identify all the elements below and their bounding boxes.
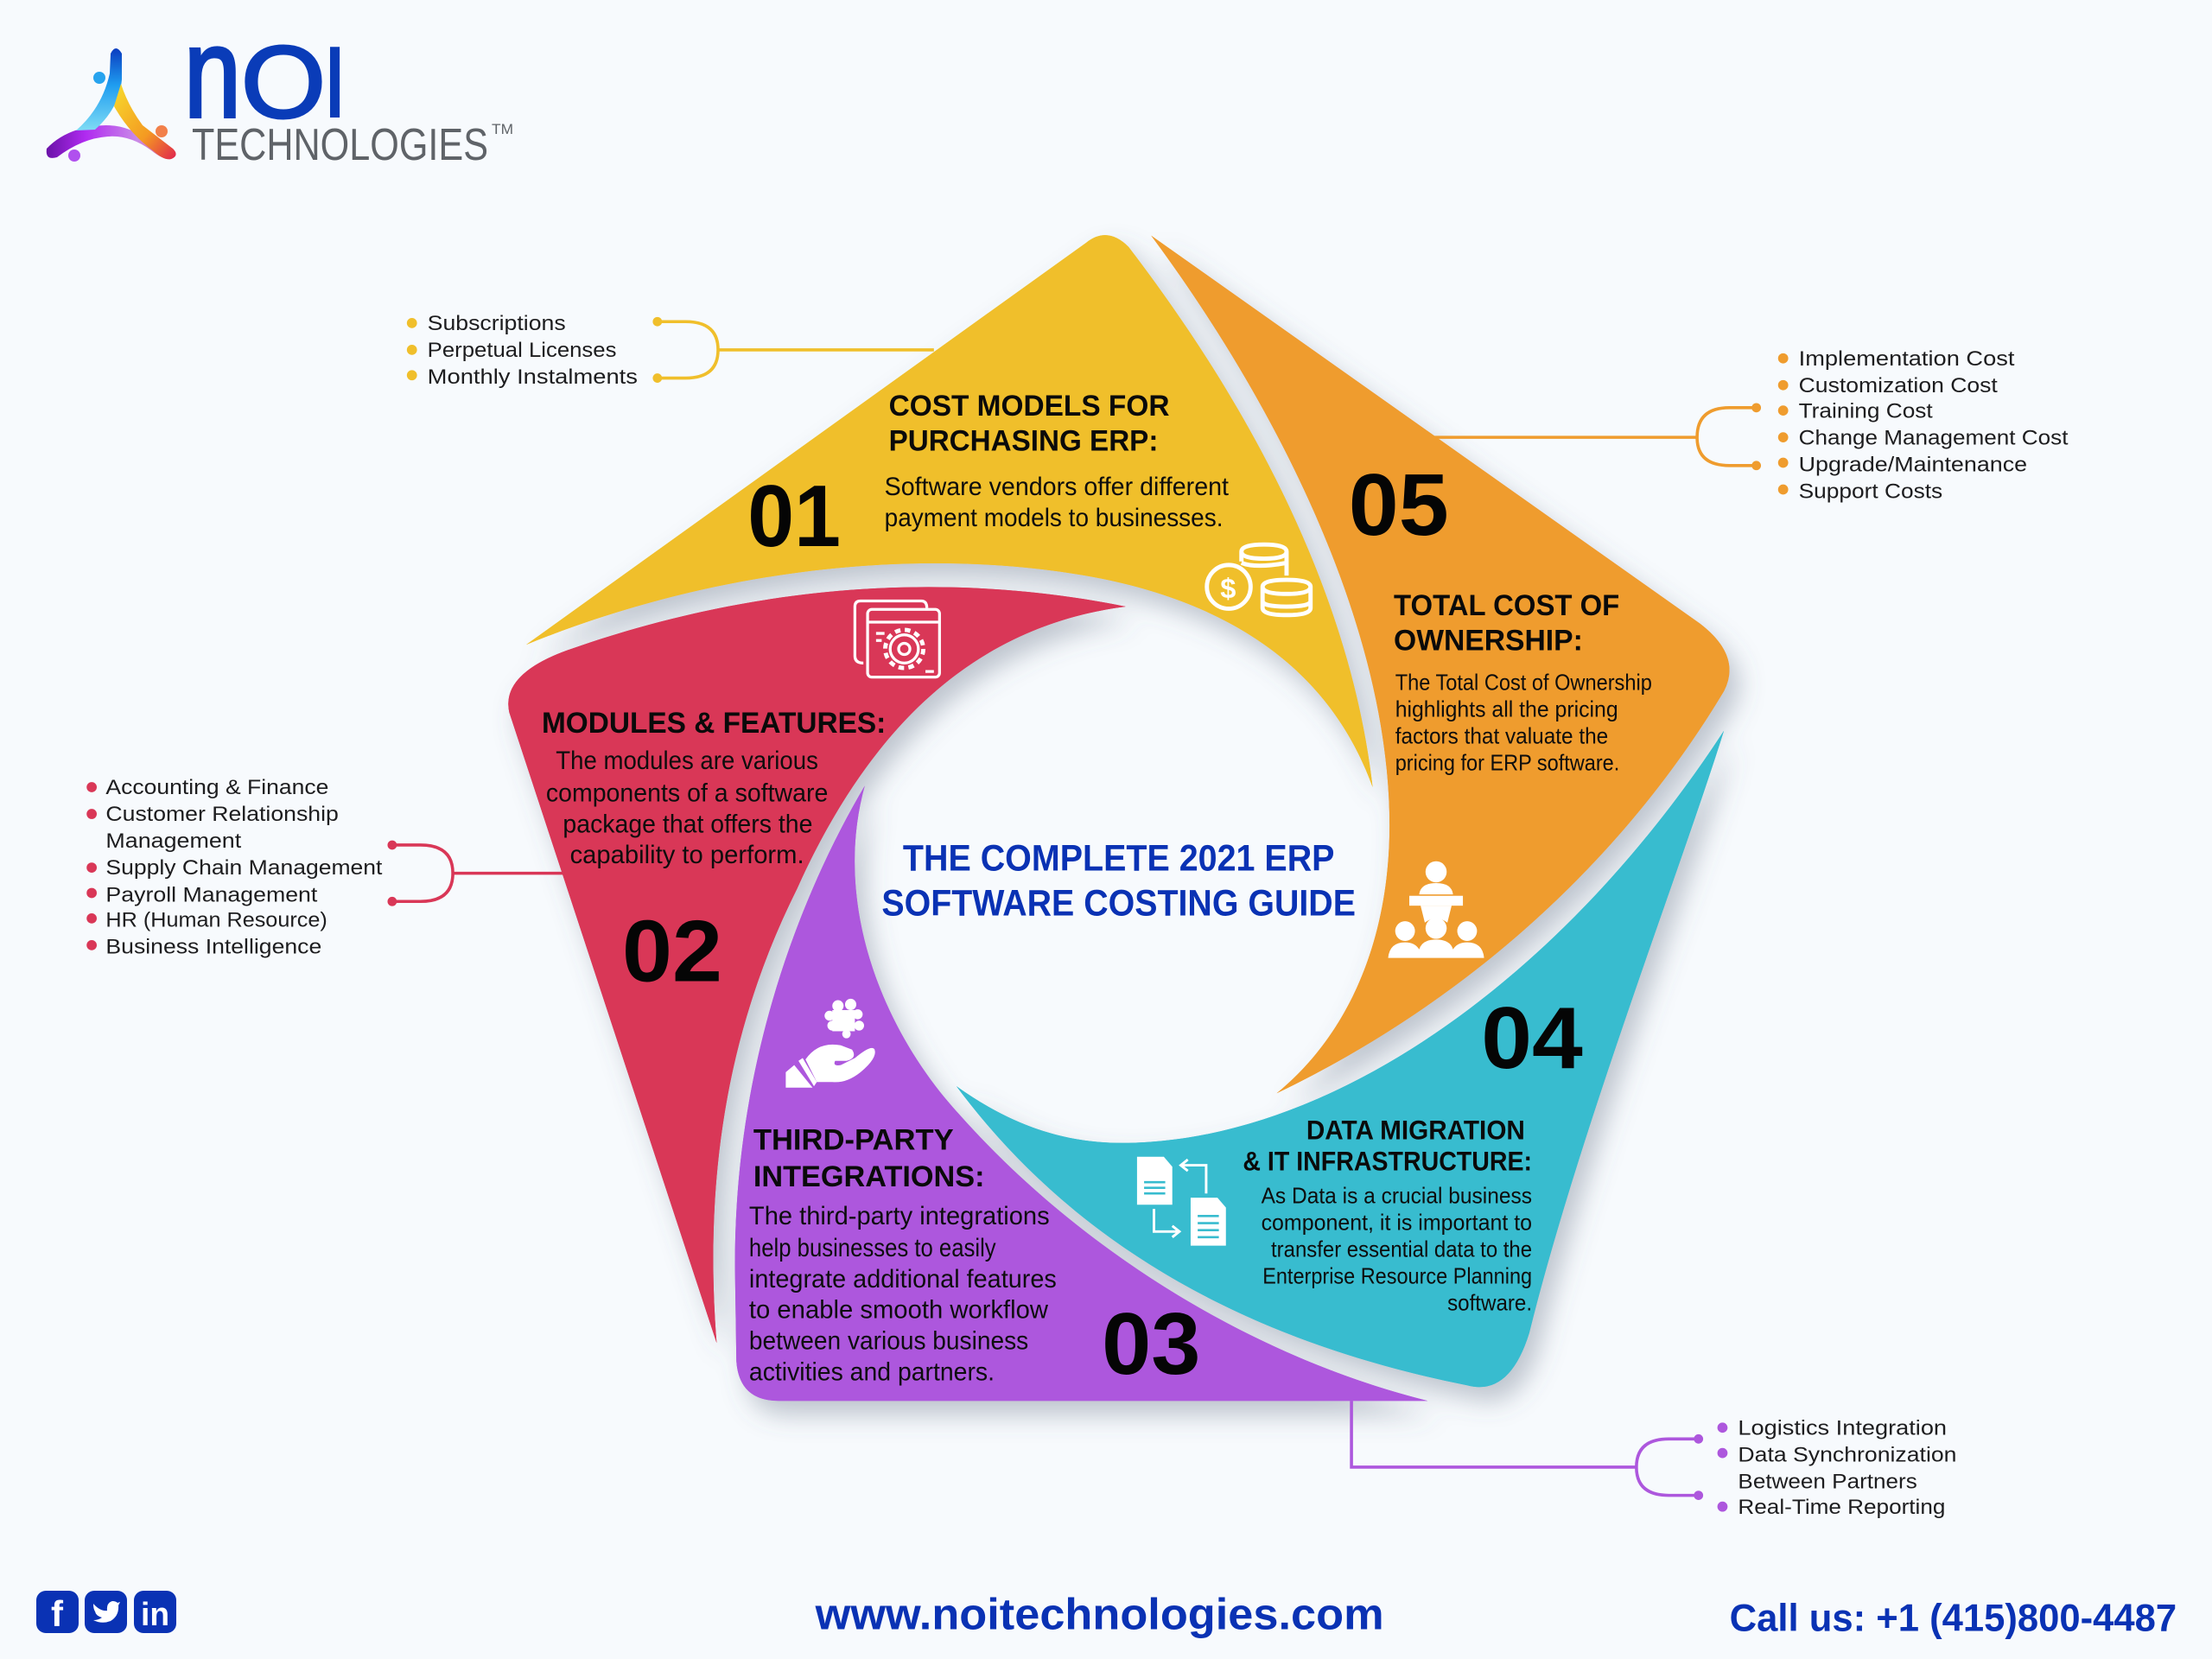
description: third-party [749,1202,1057,1387]
description: data migration: component, it is important to [1262,1210,1532,1236]
list: total cost [1778,347,2069,503]
heading: data migration: & IT INFRASTRUCTURE: [1243,1146,1532,1176]
social icons [36,1591,176,1634]
panel 04: data migration [957,731,1724,1387]
description: third-party: help businesses to easily [749,1234,996,1262]
logo subtitle: TECHNOLOGIES [192,120,488,170]
number 02: 02 [622,903,722,1001]
description: data migration: software. [1447,1290,1532,1316]
description: modules: package that offers the [563,810,812,838]
description: third-party: activities and partners. [749,1358,995,1387]
description: modules: capability to perform. [570,841,804,869]
icon: linkedin [134,1591,176,1633]
list: cost models [407,312,638,389]
description: third-party: The third-party integrations [749,1202,1050,1230]
list: total cost: Upgrade/Maintenance [1799,453,2027,476]
icon: hand with puzzle piece [785,999,875,1088]
list: total cost: Change Management Cost [1799,426,2069,449]
icon: speaker at podium [1389,861,1484,958]
icon: coins [1207,544,1311,615]
description: total cost: factors that valuate the [1395,722,1608,748]
heading: cost models [889,390,1170,458]
connector: cost models [654,319,934,381]
list: third-party: Between Partners [1738,1470,1917,1493]
icon: twitter [85,1591,127,1633]
heading: cost models: COST MODELS FOR [889,390,1170,423]
description: data migration: Enterprise Resource Planning [1262,1263,1532,1289]
logo wordmark: O [241,25,326,140]
description: cost models [885,473,1229,532]
phone: Call us: +1 (415)800-4487 [1730,1597,2177,1639]
logo wordmark: I [321,25,349,140]
heading: data migration: DATA MIGRATION [1306,1115,1525,1145]
description: total cost: pricing for ERP software. [1395,749,1619,775]
list: total cost: Customization Cost [1799,374,1998,397]
description: cost models: Software vendors offer different [885,473,1229,501]
list: modules: Accounting & Finance [105,776,328,799]
heading: third-party integrations: INTEGRATIONS: [753,1160,985,1193]
description: data migration [1262,1183,1532,1316]
list: modules: Payroll Management [105,883,318,906]
description: total cost [1395,669,1652,775]
list: modules: Management [105,830,241,853]
icon label: dollar sign: $ [1220,572,1236,604]
description: modules [546,747,828,869]
icon: facebook: f [51,1593,64,1634]
icon: linkedin: in [141,1597,169,1633]
heading: cost models: PURCHASING ERP: [889,425,1158,458]
logo [47,2,513,170]
heading: total cost: OWNERSHIP: [1394,625,1583,658]
description: total cost: highlights all the pricing [1395,696,1618,721]
list: modules: Customer Relationship [105,803,339,826]
description: total cost: The Total Cost of Ownership [1395,669,1652,695]
description: modules: The modules are various [556,747,818,775]
heading: third-party integrations: THIRD-PARTY [753,1124,954,1157]
list: third-party: Logistics Integration [1738,1416,1947,1440]
list: cost models: Perpetual Licenses [428,339,616,362]
title [881,837,1356,924]
description: modules: components of a software [546,779,828,807]
description: third-party: integrate additional features [749,1265,1057,1294]
number 04: 04 [1481,989,1583,1087]
description: third-party: to enable smooth workflow [749,1296,1049,1325]
description: third-party: between various business [749,1327,1028,1356]
list: total cost: Implementation Cost [1799,347,2015,371]
icon: facebook [36,1591,79,1634]
icon: documents exchange [1137,1157,1226,1246]
list: cost models: Monthly Instalments [428,365,638,389]
list: modules: Supply Chain Management [105,856,383,880]
heading: data migration [1243,1115,1532,1176]
panel 01: cost models [526,235,1373,787]
number 03: 03 [1102,1295,1200,1393]
description: data migration: transfer essential data to the [1271,1236,1532,1262]
description: cost models: payment models to businesses. [885,504,1224,532]
title: THE COMPLETE 2021 ERP [903,837,1334,878]
logo mark [47,48,176,162]
list: third-party [1718,1416,1956,1519]
panel 03: third-party integrations [735,785,1427,1401]
panel 02: modules and features [508,587,1126,1343]
connector: third-party [1351,1401,1701,1498]
website: www.noitechnologies.com [815,1590,1384,1639]
trademark: TM [492,121,513,137]
connector: modules [389,842,564,905]
list: third-party: Real-Time Reporting [1738,1496,1945,1519]
list: modules: Business Intelligence [105,936,321,959]
list: modules [86,776,383,959]
heading: total cost: TOTAL COST OF [1394,589,1619,622]
list: third-party: Data Synchronization [1738,1443,1956,1466]
list: total cost: Support Costs [1799,480,1942,503]
connector: total cost [1427,404,1759,468]
logo wordmark: n [184,2,241,144]
heading: modules and features: MODULES & FEATURES: [542,707,886,740]
number 01: 01 [747,467,841,565]
list: modules: HR (Human Resource) [105,909,327,932]
title: SOFTWARE COSTING GUIDE [881,883,1356,924]
heading: third-party integrations [753,1124,985,1193]
icon: windows with gear [855,601,939,677]
list: total cost: Training Cost [1799,399,1933,423]
list: cost models: Subscriptions [428,312,566,335]
number 05: 05 [1349,456,1449,554]
logo wordmark [184,2,349,144]
panel 05: total cost of ownership [1151,236,1730,1093]
description: data migration: As Data is a crucial business [1262,1183,1532,1209]
heading: total cost [1394,589,1619,658]
